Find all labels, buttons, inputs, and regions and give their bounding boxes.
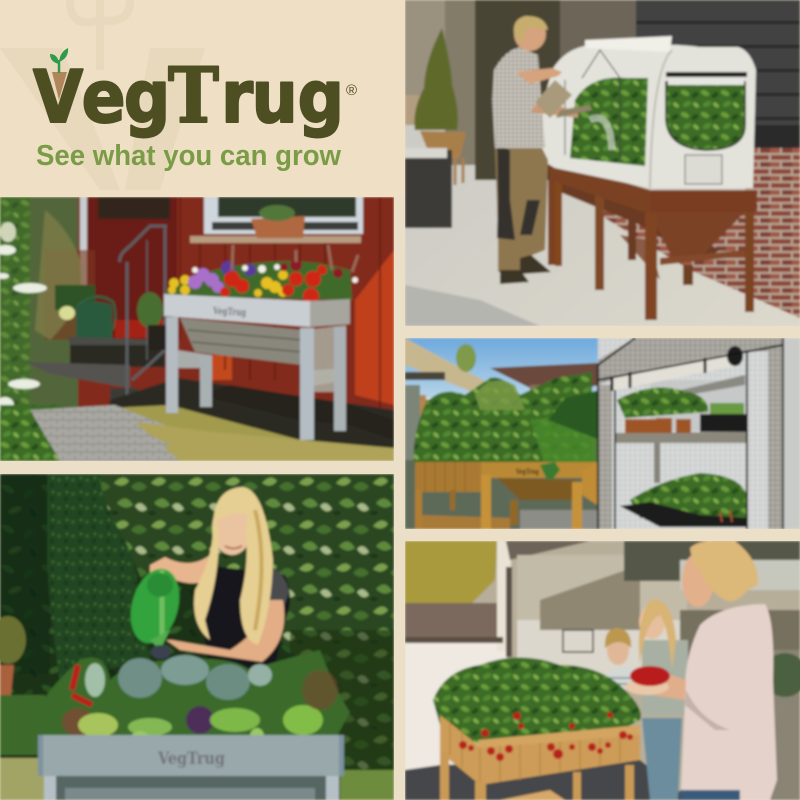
brand wordmark: u	[252, 56, 298, 140]
brand wordmark: r	[221, 56, 253, 140]
ground	[108, 377, 394, 449]
black frame	[598, 338, 783, 529]
seed trays	[620, 473, 748, 527]
brand wordmark: V	[33, 56, 83, 140]
brown roof	[490, 363, 600, 390]
panel: terrace and mini greenhouse	[405, 338, 800, 529]
vegetables	[44, 649, 350, 736]
brick wall	[600, 148, 800, 318]
panel: grey trough by red house	[0, 197, 394, 461]
building	[405, 0, 800, 180]
brand wordmark: T	[168, 52, 219, 141]
flowers in trough	[164, 245, 358, 304]
shelf	[614, 432, 747, 443]
sill planter	[190, 205, 361, 243]
roll-up tube	[612, 346, 743, 391]
panel: family with strawberries	[405, 540, 800, 800]
tagline: See what you can grow	[36, 140, 341, 172]
deck	[405, 760, 690, 800]
grey VegTrug planter: VegTrug	[212, 306, 246, 319]
planter box	[440, 715, 640, 800]
woman with bowl	[625, 540, 777, 800]
planter	[38, 735, 344, 800]
greenhouse	[598, 338, 800, 529]
brand wordmark: ®	[346, 82, 357, 99]
grey VegTrug planter	[164, 294, 350, 440]
wooden planter back	[540, 158, 757, 320]
white flowers	[0, 222, 75, 413]
planter: VegTrug	[157, 749, 225, 769]
panel: woman watering planter	[0, 474, 394, 800]
side window plants	[666, 82, 745, 150]
steps	[25, 337, 165, 402]
hedge	[47, 474, 150, 680]
wooden planters: VegTrug	[515, 467, 539, 476]
seedlings	[617, 388, 708, 418]
wooden planters	[415, 462, 597, 529]
girl	[639, 600, 688, 800]
brand wordmark: g	[298, 56, 344, 140]
left building	[405, 338, 492, 460]
panel: logo on wood	[0, 0, 405, 197]
potted bush	[0, 616, 26, 705]
boy	[598, 628, 640, 690]
left wall	[405, 640, 507, 770]
bamboo	[405, 541, 497, 605]
paving shadow	[405, 285, 540, 326]
pots	[625, 418, 691, 433]
brand wordmark: e	[82, 56, 126, 140]
brand wordmark: g	[124, 56, 170, 140]
strawberry plants	[433, 658, 641, 800]
panel: man with cold frame	[405, 0, 800, 326]
green watering can	[129, 567, 181, 660]
front window plants	[570, 78, 648, 166]
grey planter	[405, 603, 503, 643]
watering can	[76, 297, 115, 341]
left foliage	[0, 197, 80, 408]
man	[492, 16, 578, 284]
trees and plants	[414, 372, 592, 470]
railing	[120, 226, 167, 398]
door	[87, 197, 177, 347]
window	[204, 197, 363, 234]
brand wordmark	[33, 48, 357, 141]
tree foliage	[100, 474, 394, 800]
woman	[150, 487, 290, 690]
metal watering can	[535, 80, 592, 118]
topiary	[414, 28, 466, 185]
door frame and glass	[506, 541, 800, 800]
cold frame cover	[541, 36, 756, 188]
patio box	[405, 148, 452, 228]
